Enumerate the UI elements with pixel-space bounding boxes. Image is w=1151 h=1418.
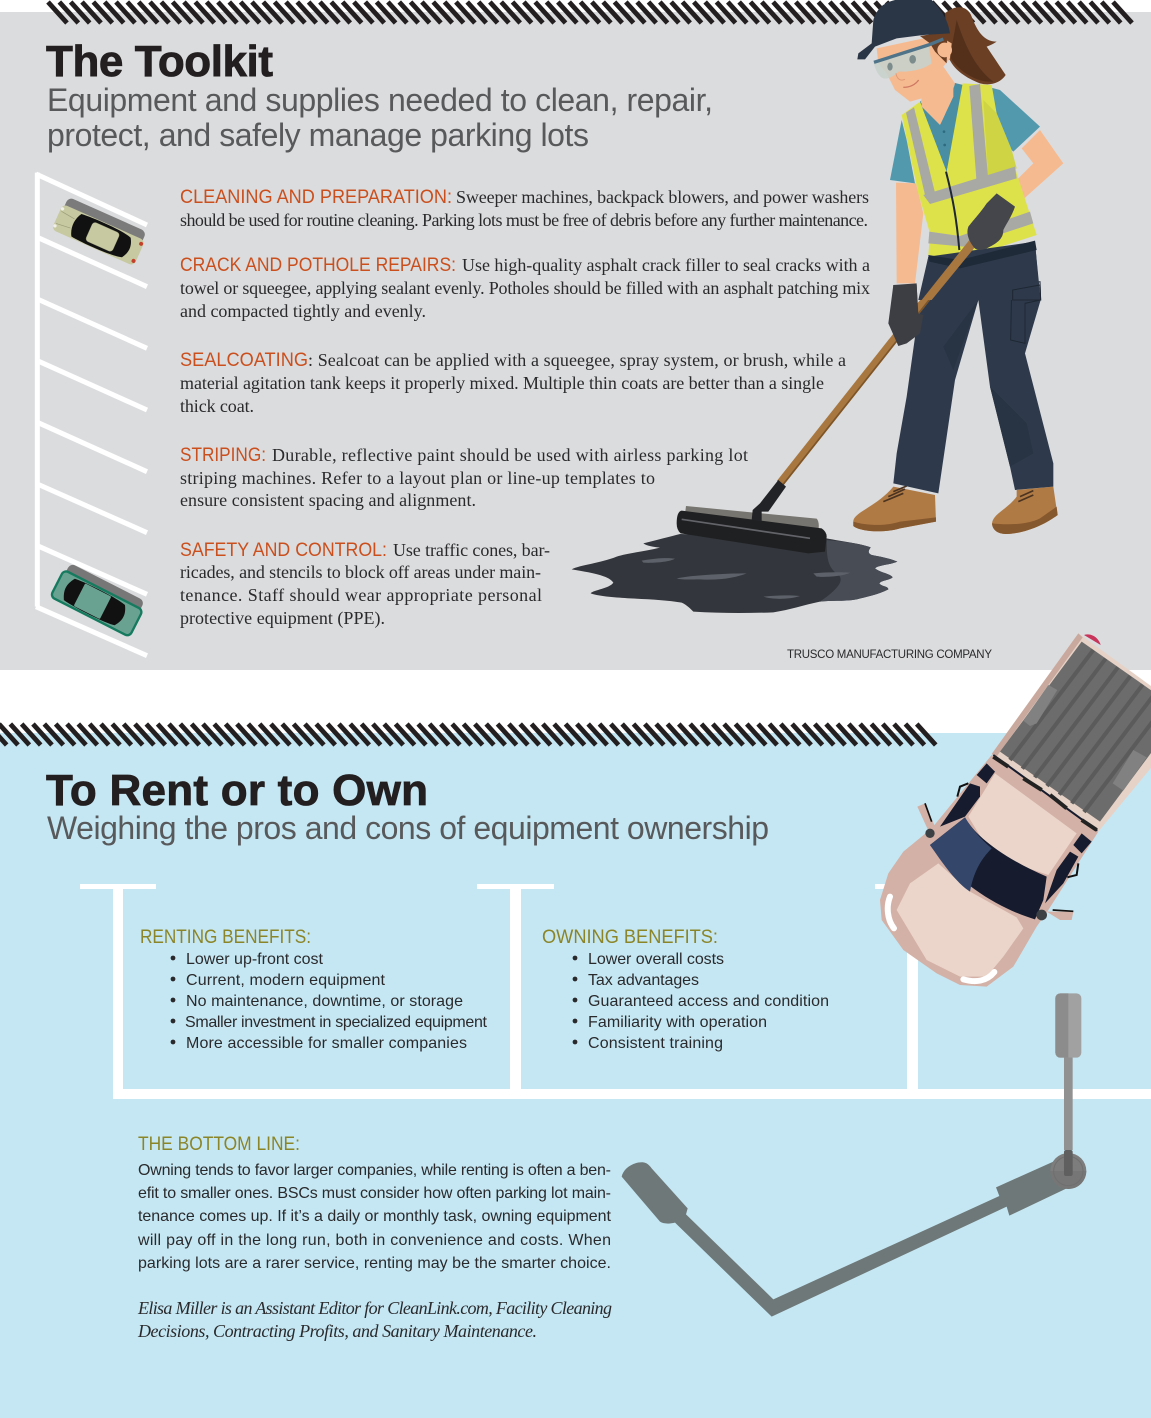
- text block: sealcoating: thick coat.: [180, 396, 254, 416]
- text block: the bottom line: [137, 1133, 612, 1272]
- text block: owning benefits: OWNING BENEFITS:: [542, 926, 718, 948]
- hatch stripe: toolkit: [48, 2, 1132, 23]
- illustration: parking lot light pole and shadow: [622, 993, 1086, 1317]
- owning benefits list: Familiarity with operation: [588, 1014, 767, 1031]
- text block: cleaning and preparation: should be used for routine cleaning. Parking lots must be free of debris before any further maintenance.: [180, 210, 868, 230]
- parking lot lines and cars: [36, 173, 149, 656]
- renting benefits list: Lower up-front cost: [186, 951, 324, 968]
- text block: the bottom line: will pay off in the long run, both in convenience and costs. When: [137, 1232, 611, 1249]
- author credit: [137, 1298, 612, 1341]
- left glove: [888, 285, 923, 346]
- owning benefits list: [573, 951, 829, 1052]
- truck bed: [992, 633, 1151, 832]
- mirrors: [917, 803, 935, 831]
- panel: the toolkit: [0, 2, 1151, 670]
- renting benefits list: No maintenance, downtime, or storage: [186, 993, 463, 1010]
- title: to rent or to own: To Rent or to Own: [46, 766, 428, 815]
- subtitle: the toolkit: Equipment and supplies needed to clean, repair,: [47, 82, 713, 118]
- text block: crack and pothole repairs: CRACK AND POTHOLE REPAIRS:: [180, 254, 456, 276]
- renting benefits list: [171, 951, 488, 1052]
- owning benefits list: Tax advantages: [588, 972, 699, 989]
- text block: safety and control: ricades, and stencils to block off areas under main-: [180, 562, 541, 582]
- text block: safety and control: Use traffic cones, bar-: [393, 540, 550, 560]
- text block: safety and control: SAFETY AND CONTROL:: [180, 539, 387, 561]
- text block: renting benefits: [140, 926, 488, 1052]
- text block: striping: Durable, reflective paint should be used with airless parking lot: [272, 445, 748, 465]
- text block: safety and control: protective equipment (PPE).: [180, 608, 385, 629]
- subtitle: rent or own: Weighing the pros and cons of equipment ownership: [47, 810, 769, 846]
- author credit: Elisa Miller is an Assistant Editor for CleanLink.com, Facility Cleaning: [137, 1298, 612, 1318]
- boots and trousers: [752, 237, 1058, 534]
- owning benefits list: Lower overall costs: [588, 951, 724, 968]
- text block: renting benefits: RENTING BENEFITS:: [140, 926, 311, 948]
- text block: crack and pothole repairs: and compacted tightly and evenly.: [180, 301, 426, 321]
- torso, head and arms: [857, 0, 1063, 300]
- text block: crack and pothole repairs: [180, 254, 870, 321]
- renting benefits list: More accessible for smaller companies: [186, 1035, 467, 1052]
- text block: the bottom line: Owning tends to favor larger companies, while renting is often a ben-: [138, 1162, 611, 1179]
- text block: sealcoating: : Sealcoat can be applied with a squeegee, spray system, or brush, while a: [308, 350, 846, 370]
- text block: cleaning and preparation: Sweeper machines, backpack blowers, and power washers: [456, 187, 869, 207]
- text block: owning benefits: [542, 926, 829, 1052]
- text block: cleaning and preparation: [180, 186, 869, 230]
- illustration: pickup truck: [880, 633, 1151, 987]
- text block: the bottom line: efit to smaller ones. BSCs must consider how often parking lot main-: [138, 1185, 611, 1202]
- text block: sealcoating: [180, 349, 846, 416]
- windshield: [930, 817, 1047, 919]
- title: the toolkit: The Toolkit: [46, 37, 273, 86]
- side windows: [940, 783, 980, 827]
- car: tan sedan: [52, 196, 149, 266]
- image credit: TRUSCO MANUFACTURING COMPANY: [787, 649, 992, 661]
- car: green sedan: [50, 562, 147, 637]
- text block: striping: ensure consistent spacing and alignment.: [180, 490, 476, 510]
- owning benefits list: Guaranteed access and condition: [588, 993, 829, 1010]
- asphalt puddle and squeegee head: [572, 506, 897, 613]
- text block: crack and pothole repairs: Use high-quality asphalt crack filler to seal cracks with a: [462, 255, 870, 275]
- text block: striping: [180, 444, 748, 510]
- text block: crack and pothole repairs: towel or squeegee, applying sealant evenly. Potholes should be filled with an asphalt patching mix: [180, 278, 870, 298]
- text block: cleaning and preparation: CLEANING AND PREPARATION:: [180, 186, 452, 208]
- renting benefits list: Smaller investment in specialized equipment: [185, 1014, 488, 1031]
- panel: to rent or to own: [0, 724, 1151, 1418]
- text block: safety and control: tenance. Staff should wear appropriate personal: [180, 585, 542, 605]
- text block: striping: STRIPING:: [180, 444, 266, 466]
- headlights: [888, 897, 894, 928]
- text block: striping: striping machines. Refer to a layout plan or line-up templates to: [180, 468, 655, 488]
- subtitle: the toolkit: [47, 82, 713, 153]
- text block: the bottom line: THE BOTTOM LINE:: [138, 1133, 300, 1155]
- text block: the bottom line: tenance comes up. If it’s a daily or monthly task, owning equipment: [138, 1208, 612, 1225]
- subtitle: the toolkit: protect, and safely manage parking lots: [47, 117, 589, 153]
- author credit: Decisions, Contracting Profits, and Sanitary Maintenance.: [137, 1321, 537, 1341]
- hatch stripe: rent or own: [0, 724, 936, 745]
- owning benefits list: Consistent training: [588, 1035, 723, 1052]
- parking space lines: [80, 884, 1151, 1099]
- renting benefits list: Current, modern equipment: [186, 972, 386, 989]
- truck cab and hood: [880, 755, 1098, 987]
- text block: safety and control: [180, 539, 550, 629]
- text block: the bottom line: parking lots are a rarer service, renting may be the smarter choice.: [138, 1255, 611, 1272]
- illustration: worker with squeegee: [572, 0, 1063, 613]
- text block: sealcoating: SEALCOATING: [180, 349, 308, 371]
- text block: sealcoating: material agitation tank keeps it properly mixed. Multiple thin coats are better than a single: [180, 373, 824, 393]
